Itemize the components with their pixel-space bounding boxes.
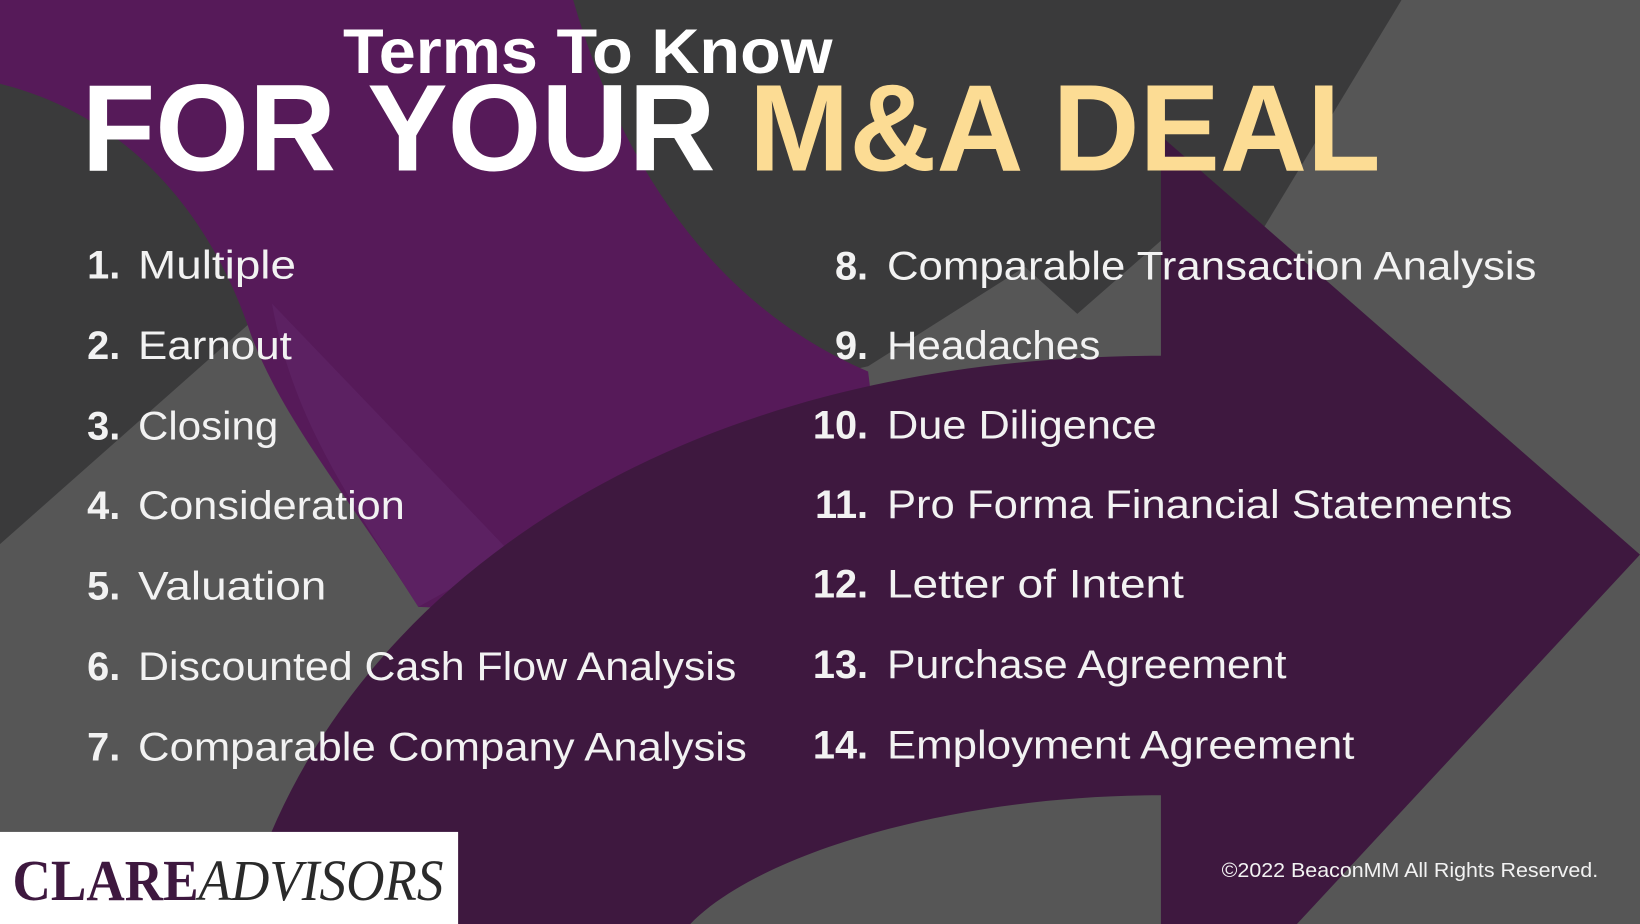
list: right column	[813, 244, 1536, 768]
list: right column: Headaches	[887, 324, 1100, 368]
list: right column: Letter of Intent	[887, 563, 1184, 607]
list: right column: 9.	[835, 324, 868, 368]
list: left column: 1.	[87, 243, 120, 287]
list: left column: 2.	[87, 324, 120, 368]
list: right column: 14.	[813, 724, 868, 768]
list: right column: 13.	[813, 643, 868, 687]
list: right column: 11.	[815, 483, 868, 527]
list: left column: 5.	[87, 565, 120, 609]
logo: Clare Advisors: CLAREADVISORS	[13, 848, 443, 913]
list: right column: Pro Forma Financial Statements	[887, 483, 1512, 527]
list: right column: 8.	[835, 244, 868, 288]
logo: Clare Advisors	[0, 832, 458, 924]
list: left column: Multiple	[138, 243, 296, 287]
list: left column: 3.	[87, 404, 120, 449]
list: left column: Earnout	[138, 324, 292, 368]
list: left column: Discounted Cash Flow Analysis	[138, 645, 736, 689]
list: right column: 10.	[813, 403, 868, 447]
list: left column	[87, 243, 747, 770]
list: left column: 4.	[87, 484, 120, 528]
list: right column: Due Diligence	[887, 403, 1157, 447]
list: right column: Employment Agreement	[887, 724, 1354, 768]
list: right column: 12.	[813, 563, 868, 607]
title: FOR YOUR M&A DEAL: FOR YOUR M&A DEAL	[82, 60, 1381, 198]
list: left column: Consideration	[138, 484, 405, 528]
list: left column: 7.	[87, 726, 120, 770]
list: right column: Comparable Transaction Analysis	[887, 244, 1536, 288]
list: left column: Comparable Company Analysis	[138, 726, 747, 770]
list: left column: Valuation	[138, 565, 326, 609]
list: right column: Purchase Agreement	[887, 643, 1286, 687]
list: left column: 6.	[87, 645, 120, 689]
list: left column: Closing	[138, 404, 278, 449]
copyright: ©2022 BeaconMM All Rights Reserved.	[1222, 860, 1598, 882]
title: Terms To Know: Terms To Know	[343, 17, 833, 87]
